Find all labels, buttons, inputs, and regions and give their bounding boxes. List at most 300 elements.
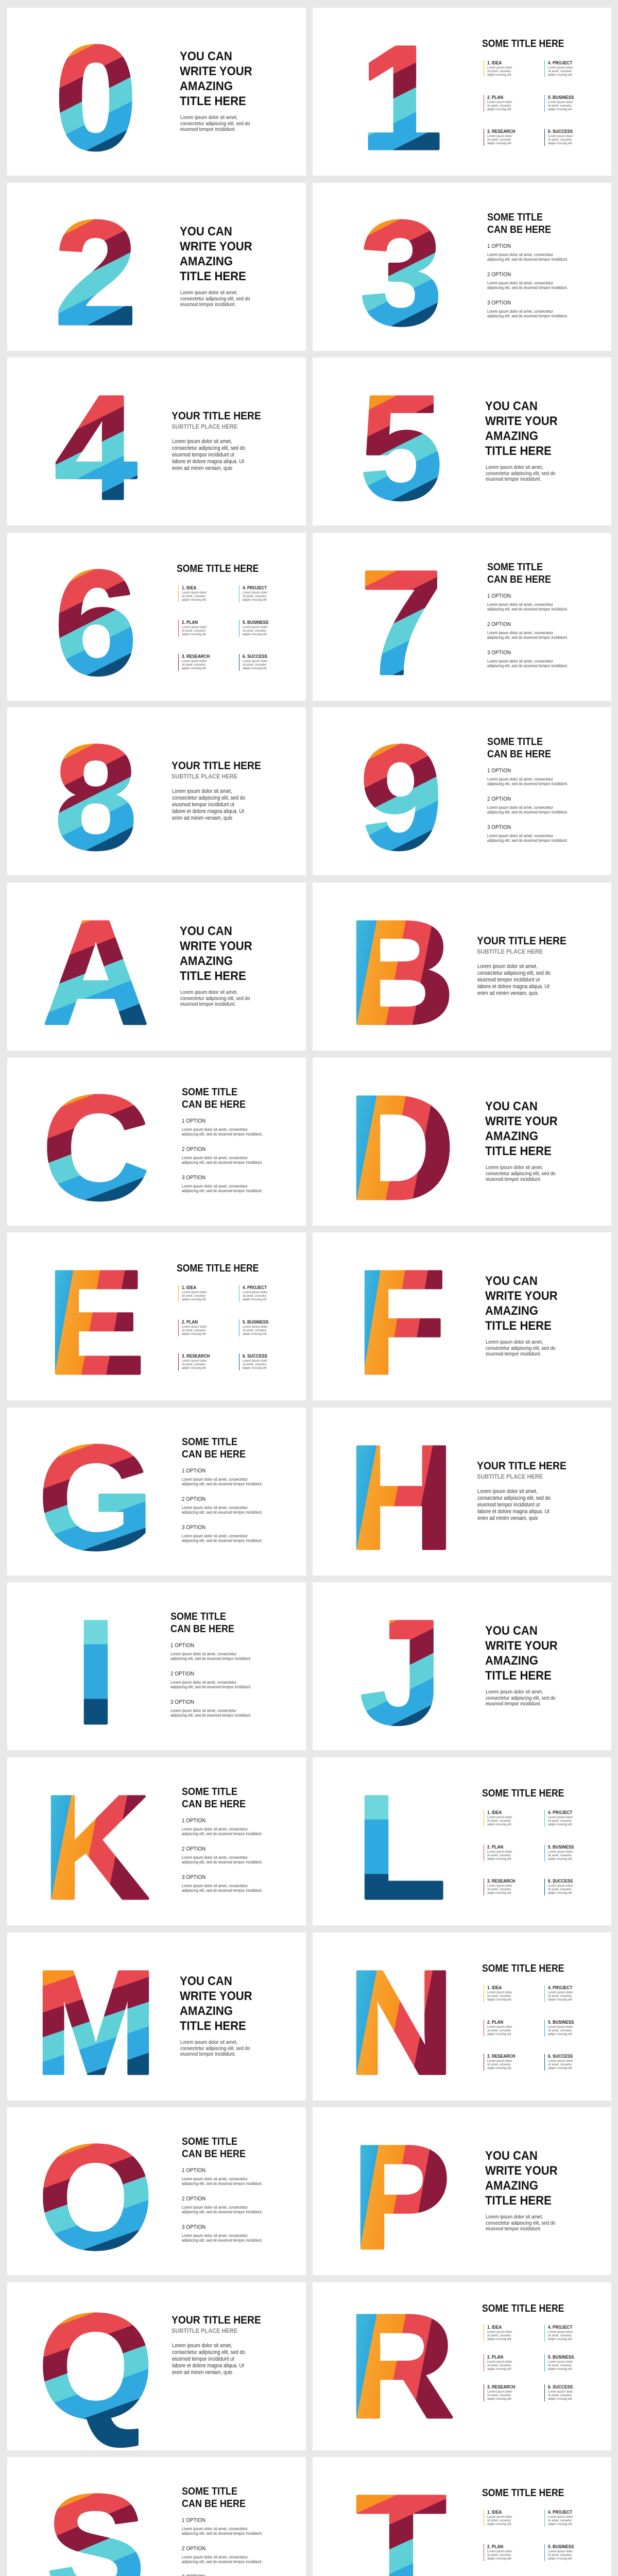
option 3: adipiscing elit, sed do eiusmod tempor incididunt. [487,838,568,843]
body text: eiusmod tempor incididunt ut [172,2356,234,2362]
item: business: sit amet, consetur [243,1329,266,1332]
title: SOME TITLE [182,1087,237,1098]
body text: eiusmod tempor incididunt. [180,2051,236,2057]
item: project [544,1985,596,2002]
panel: R [313,2282,611,2450]
option 3: Lorem ipsum dolor sit amet, consectetur [487,659,553,664]
item: plan [484,95,535,112]
option 2: 2 OPTION [487,621,511,628]
option 2: 2 OPTION [170,1671,194,1677]
title [170,1611,234,1635]
list: six items [484,60,574,146]
body text: eiusmod tempor incididunt ut [477,1502,540,1508]
title: CAN BE HERE [487,574,551,585]
option 1: adipiscing elit, sed do eiusmod tempor incididunt. [487,607,568,612]
item: research: sit amet, consetur [487,138,511,142]
option 2: adipiscing elit, sed do eiusmod tempor incididunt. [182,2560,263,2564]
list: six items [484,2325,602,2412]
item: idea: sit amet, consetur [487,1994,511,1998]
option 3 [182,1175,285,1195]
item: idea: Lorem ipsum dolor [182,1291,207,1294]
item: business [544,2354,596,2371]
item: idea: 1. IDEA [487,1985,502,1990]
title: CAN BE HERE [182,2498,246,2510]
item: research: Lorem ipsum dolor [487,2059,512,2063]
title: CAN BE HERE [182,2148,246,2160]
item: research: adipin nnscing elit [487,1891,511,1895]
item: business: 5. BUSINESS [243,620,268,625]
item: idea: Lorem ipsum dolor [487,66,512,70]
item: business: sit amet, consetur [548,104,572,108]
option 3 [170,1699,273,1720]
option 2: Lorem ipsum dolor sit amet, consectetur [170,1680,236,1685]
title [182,2136,246,2160]
body text: eiusmod tempor incididunt ut [172,452,234,458]
title: SOME TITLE HERE [482,2487,564,2499]
subtitle: SUBTITLE PLACE HERE [171,773,237,780]
body text: Lorem ipsum dolor sit amet, [172,438,232,445]
option 3: adipiscing elit, sed do eiusmod tempor incididunt. [182,1538,263,1543]
item: research: 3. RESEARCH [182,1353,210,1359]
option 1 [487,243,568,262]
body text [180,114,250,132]
item: idea [178,585,230,602]
body text: Lorem ipsum dolor sit amet, [180,290,237,296]
body text: consectetur adipiscing elit, sed do [180,296,250,302]
title: TITLE HERE [180,269,246,283]
body text [172,788,245,821]
panel: E [7,1232,306,1400]
item: research [484,129,535,146]
item: business: sit amet, consetur [548,2029,572,2032]
body text: eiusmod tempor incididunt. [486,1351,541,1357]
panel: O [7,2107,306,2275]
title: WRITE YOUR [485,2164,558,2178]
body text: consectetur adipiscing elit, sed do [486,1171,556,1177]
item: idea: Lorem ipsum dolor [487,2515,512,2519]
item: research: 3. RESEARCH [182,654,210,659]
item: project: adipin nnscing elit [548,73,572,77]
title: CAN BE HERE [182,1099,246,1110]
item: success: adipin nnscing elit [243,1366,267,1370]
title [182,1786,246,1810]
body text: enim ad minim veniam, quis [477,990,538,996]
item: success [544,1878,596,1895]
option 3: adipiscing elit, sed do eiusmod tempor incididunt. [182,2238,263,2243]
title [180,1974,252,2033]
item: business: sit amet, consetur [548,1854,572,1857]
item: idea: 1. IDEA [487,2510,502,2515]
option 1: Lorem ipsum dolor sit amet, consectetur [182,1827,248,1832]
item: project: sit amet, consetur [548,1994,572,1998]
body text: Lorem ipsum dolor sit amet, [172,2343,232,2349]
item: project: adipin nnscing elit [548,2337,572,2341]
item: plan: 2. PLAN [487,2354,503,2360]
item: success [544,129,596,146]
item: business: 5. BUSINESS [548,2544,574,2549]
title: SOME TITLE [170,1611,226,1622]
title: WRITE YOUR [180,64,252,78]
option 1: Lorem ipsum dolor sit amet, consectetur [487,602,553,607]
item: project: sit amet, consetur [548,2334,572,2337]
item: business: Lorem ipsum dolor [548,2360,573,2364]
title: YOU CAN [180,49,232,63]
item: plan [484,2020,535,2037]
title [180,49,252,108]
option 1: 1 OPTION [487,243,511,249]
body text: consectetur adipiscing elit, sed do [486,2220,556,2226]
item: project: sit amet, consetur [243,595,266,598]
option 3: Lorem ipsum dolor sit amet, consectetur [182,1184,248,1189]
option 3: 3 OPTION [182,2224,205,2230]
title: CAN BE HERE [487,749,551,760]
option 2 [182,1496,285,1517]
item: business: Lorem ipsum dolor [243,625,267,629]
panel: G [7,1408,306,1575]
option 3 [182,1874,285,1895]
title: SOME TITLE HERE [177,563,259,574]
body text [477,1488,551,1522]
item: project: 4. PROJECT [548,60,572,65]
item: idea: Lorem ipsum dolor [182,591,207,595]
item: plan: Lorem ipsum dolor [487,1850,512,1854]
option 2: adipiscing elit, sed do eiusmod tempor incididunt. [487,285,568,290]
option 2: adipiscing elit, sed do eiusmod tempor incididunt. [487,635,568,640]
item: idea: sit amet, consetur [182,595,205,598]
option 1 [487,768,568,786]
item: research [178,1353,230,1370]
option 1: Lorem ipsum dolor sit amet, consectetur [182,2527,248,2531]
item: plan: sit amet, consetur [487,2364,511,2367]
title [485,1274,558,1333]
body text: eiusmod tempor incididunt. [180,126,236,132]
title: CAN BE HERE [170,1623,234,1635]
item: research: sit amet, consetur [182,663,205,667]
option 3: 3 OPTION [170,1699,194,1705]
item: research [484,2054,535,2071]
panel: F [313,1232,611,1400]
option 1 [182,2517,285,2538]
item: plan: sit amet, consetur [182,1329,205,1332]
item: project: sit amet, consetur [548,2519,572,2522]
option 2: adipiscing elit, sed do eiusmod tempor incididunt. [170,1685,251,1689]
subtitle: SUBTITLE PLACE HERE [477,1473,543,1480]
option 1 [487,593,568,612]
item: idea: 1. IDEA [487,2325,502,2330]
item: idea [484,1810,535,1827]
title: SOME TITLE [182,1786,237,1798]
body text: eiusmod tempor incididunt ut [172,802,234,808]
item: plan: 2. PLAN [487,95,503,100]
title: WRITE YOUR [180,939,252,953]
option 1: adipiscing elit, sed do eiusmod tempor incididunt. [487,782,568,786]
item: project: 4. PROJECT [548,1810,572,1815]
option 3: Lorem ipsum dolor sit amet, consectetur [182,1534,248,1538]
option 2: adipiscing elit, sed do eiusmod tempor incididunt. [182,1860,263,1865]
item: project: 4. PROJECT [548,1985,572,1990]
item: idea: sit amet, consetur [182,1294,205,1298]
body text: labore et dolore magna aliqua. Ut [172,2363,244,2369]
item: project: adipin nnscing elit [243,598,267,602]
title: WRITE YOUR [485,1639,558,1653]
body text: Lorem ipsum dolor sit amet, [486,464,543,470]
item: plan: sit amet, consetur [182,629,205,633]
body text [180,290,250,308]
item: idea: Lorem ipsum dolor [487,2330,512,2334]
item: business: Lorem ipsum dolor [548,100,573,104]
title: CAN BE HERE [182,1799,246,1810]
option 3: Lorem ipsum dolor sit amet, consectetur [487,309,553,314]
option 1: adipiscing elit, sed do eiusmod tempor incididunt. [182,1132,263,1137]
option 1: Lorem ipsum dolor sit amet, consectetur [182,1477,248,1482]
title: YOUR TITLE HERE [171,410,261,422]
item: project: sit amet, consetur [548,70,572,73]
item: idea: sit amet, consetur [487,2519,511,2522]
title [182,1087,246,1110]
item: research: Lorem ipsum dolor [487,2390,512,2394]
item: plan: Lorem ipsum dolor [487,2025,512,2029]
item: business: adipin nnscing elit [548,108,572,111]
title: SOME TITLE [487,212,543,223]
title: YOU CAN [485,1274,538,1288]
title: AMAZING [485,1304,538,1318]
item: plan: 2. PLAN [487,2544,503,2549]
item: idea [178,1285,230,1302]
title: AMAZING [485,2179,538,2193]
title: CAN BE HERE [487,224,551,235]
title: SOME TITLE [182,2486,237,2497]
body text: consectetur adipiscing elit, sed do [477,970,551,976]
item: business: Lorem ipsum dolor [548,2025,573,2029]
item: business: Lorem ipsum dolor [548,2550,573,2553]
body text: Lorem ipsum dolor sit amet, [477,963,538,970]
item: project: sit amet, consetur [243,1294,266,1298]
body text: Lorem ipsum dolor sit amet, [172,788,232,794]
option 3 [487,824,568,843]
body text: eiusmod tempor incididunt. [486,2226,541,2232]
item: project: Lorem ipsum dolor [548,2330,573,2334]
item: success: adipin nnscing elit [548,1891,572,1895]
body text: Lorem ipsum dolor sit amet, [486,1339,543,1345]
title: AMAZING [180,79,233,93]
option 1 [170,1642,273,1663]
option 1: 1 OPTION [182,1468,205,1474]
panel: 7 [313,533,611,701]
option 2: 2 OPTION [182,2196,205,2202]
item: plan [178,620,230,637]
item: project: Lorem ipsum dolor [243,1291,267,1294]
panel: H [313,1408,611,1575]
title: TITLE HERE [485,2194,552,2208]
option 2: Lorem ipsum dolor sit amet, consectetur [182,1855,248,1860]
item: research: Lorem ipsum dolor [487,1884,512,1888]
option 3 [487,300,568,318]
item: business [239,1319,290,1336]
body text [486,1165,556,1183]
body text: consectetur adipiscing elit, sed do [180,995,250,1002]
option 3: adipiscing elit, sed do eiusmod tempor incididunt. [170,1713,251,1718]
item: plan [178,1319,230,1336]
option 2 [170,1671,273,1691]
item: plan: 2. PLAN [182,620,198,625]
item: project: adipin nnscing elit [548,2522,572,2526]
panel: B [313,883,611,1050]
title: YOUR TITLE HERE [477,1460,566,1472]
item: project [239,1285,290,1302]
item: research: Lorem ipsum dolor [182,1359,207,1363]
option 1: 1 OPTION [182,1818,205,1824]
item: business: adipin nnscing elit [548,2032,572,2036]
body text: consectetur adipiscing elit, sed do [180,2045,250,2052]
option 1: 1 OPTION [487,768,511,774]
item: idea: sit amet, consetur [487,70,511,73]
panel: Q [7,2282,306,2450]
item: plan: Lorem ipsum dolor [182,1325,207,1329]
option 2: adipiscing elit, sed do eiusmod tempor incididunt. [182,1510,263,1515]
item: research [484,1878,535,1895]
option 1: adipiscing elit, sed do eiusmod tempor incididunt. [182,1482,263,1486]
item: business: 5. BUSINESS [548,2020,574,2025]
item: idea [484,60,535,77]
title: WRITE YOUR [485,414,558,428]
body text: consectetur adipiscing elit, sed do [172,445,245,451]
option 3: adipiscing elit, sed do eiusmod tempor incididunt. [182,1888,263,1893]
body text: consectetur adipiscing elit, sed do [486,1695,556,1701]
item: plan: adipin nnscing elit [182,633,206,636]
option 3 [182,1524,285,1545]
body text: Lorem ipsum dolor sit amet, [486,1164,543,1171]
option 3: adipiscing elit, sed do eiusmod tempor incididunt. [487,314,568,318]
item: success: Lorem ipsum dolor [548,1884,573,1888]
item: plan: sit amet, consetur [487,1854,511,1857]
panel: N [313,1933,611,2100]
item: plan: Lorem ipsum dolor [182,625,207,629]
title: AMAZING [485,1129,538,1143]
item: project [544,60,596,77]
title: YOUR TITLE HERE [171,760,261,772]
title [487,562,551,585]
title [182,2485,246,2510]
item: success: adipin nnscing elit [548,2066,572,2070]
item: success: 6. SUCCESS [243,654,267,659]
title [180,924,252,983]
option 1: 1 OPTION [487,593,511,599]
item: idea [484,1985,535,2002]
title: SOME TITLE HERE [482,2303,564,2314]
item: plan: adipin nnscing elit [487,108,511,111]
option 3: Lorem ipsum dolor sit amet, consectetur [487,834,553,838]
item: business: 5. BUSINESS [548,2354,574,2360]
item: project: Lorem ipsum dolor [548,1991,573,1994]
body text: labore et dolore magna aliqua. Ut [172,808,244,815]
item: research: 3. RESEARCH [487,2384,515,2389]
item: project [544,1810,596,1827]
body text: eiusmod tempor incididunt. [486,476,541,482]
title [485,2148,558,2208]
option 3: 3 OPTION [487,650,511,656]
title: SOME TITLE [487,562,543,573]
body text [172,438,245,471]
item: success: 6. SUCCESS [243,1353,267,1359]
option 3 [487,650,568,668]
item: business: adipin nnscing elit [548,1857,572,1861]
panel: 5 [313,358,611,526]
option 1 [182,1818,285,1838]
body text: labore et dolore magna aliqua. Ut [477,1509,550,1515]
title: SOME TITLE [182,1436,237,1448]
title: YOU CAN [485,1624,538,1638]
option 2: Lorem ipsum dolor sit amet, consectetur [487,631,553,635]
title: YOU CAN [485,1099,538,1113]
letter: R: R [348,2283,455,2449]
item: research: sit amet, consetur [182,1363,205,1366]
option 1: adipiscing elit, sed do eiusmod tempor incididunt. [182,1832,263,1836]
item: project: 4. PROJECT [243,1285,267,1290]
item: business [239,620,290,637]
title: TITLE HERE [485,444,552,458]
option 2: Lorem ipsum dolor sit amet, consectetur [182,2205,248,2210]
item: research: adipin nnscing elit [182,667,206,670]
item: project: 4. PROJECT [548,2325,572,2330]
option 2: Lorem ipsum dolor sit amet, consectetur [182,1505,248,1510]
option 2: 2 OPTION [182,1496,205,1502]
item: plan: 2. PLAN [487,2020,503,2025]
item: idea: 1. IDEA [182,1285,196,1290]
item: success: Lorem ipsum dolor [243,659,267,663]
title [485,1623,558,1683]
option 1: adipiscing elit, sed do eiusmod tempor incididunt. [182,2531,263,2536]
option 3: Lorem ipsum dolor sit amet, consectetur [182,2233,248,2238]
option 3 [182,2224,285,2245]
item: success: Lorem ipsum dolor [548,2059,573,2063]
item: idea: 1. IDEA [487,1810,502,1815]
item: project: adipin nnscing elit [243,1298,267,1301]
panel: T [313,2457,611,2576]
body text: eiusmod tempor incididunt. [180,1001,236,1007]
title: WRITE YOUR [180,1989,252,2003]
body text [486,464,556,482]
title: CAN BE HERE [182,1449,246,1460]
item: business [544,2020,596,2037]
list: six items [178,585,269,671]
body text [486,1340,556,1358]
item: research: adipin nnscing elit [487,2397,511,2401]
item: business: 5. BUSINESS [243,1319,268,1325]
option 2 [182,1846,285,1867]
title: TITLE HERE [485,1669,552,1683]
title: YOU CAN [180,1974,232,1988]
item: success: sit amet, consetur [548,2394,572,2397]
option 3: 3 OPTION [487,300,511,306]
option 2: Lorem ipsum dolor sit amet, consectetur [487,281,553,285]
item: plan: Lorem ipsum dolor [487,2550,512,2553]
body text: enim ad minim veniam, quis [477,1515,538,1521]
body text: Lorem ipsum dolor sit amet, [180,2039,237,2045]
title: YOUR TITLE HERE [477,935,566,947]
title [485,399,558,458]
body text: Lorem ipsum dolor sit amet, [486,1689,543,1695]
item: project [239,585,290,602]
item: research: Lorem ipsum dolor [487,134,512,138]
item: project: 4. PROJECT [243,585,267,590]
item: idea: 1. IDEA [182,585,196,590]
option 2: 2 OPTION [487,796,511,802]
body text [172,2343,245,2376]
item: success [239,654,290,671]
item: success: sit amet, consetur [243,1363,266,1366]
item: research: adipin nnscing elit [487,2066,511,2070]
body text: Lorem ipsum dolor sit amet, [486,2214,543,2220]
